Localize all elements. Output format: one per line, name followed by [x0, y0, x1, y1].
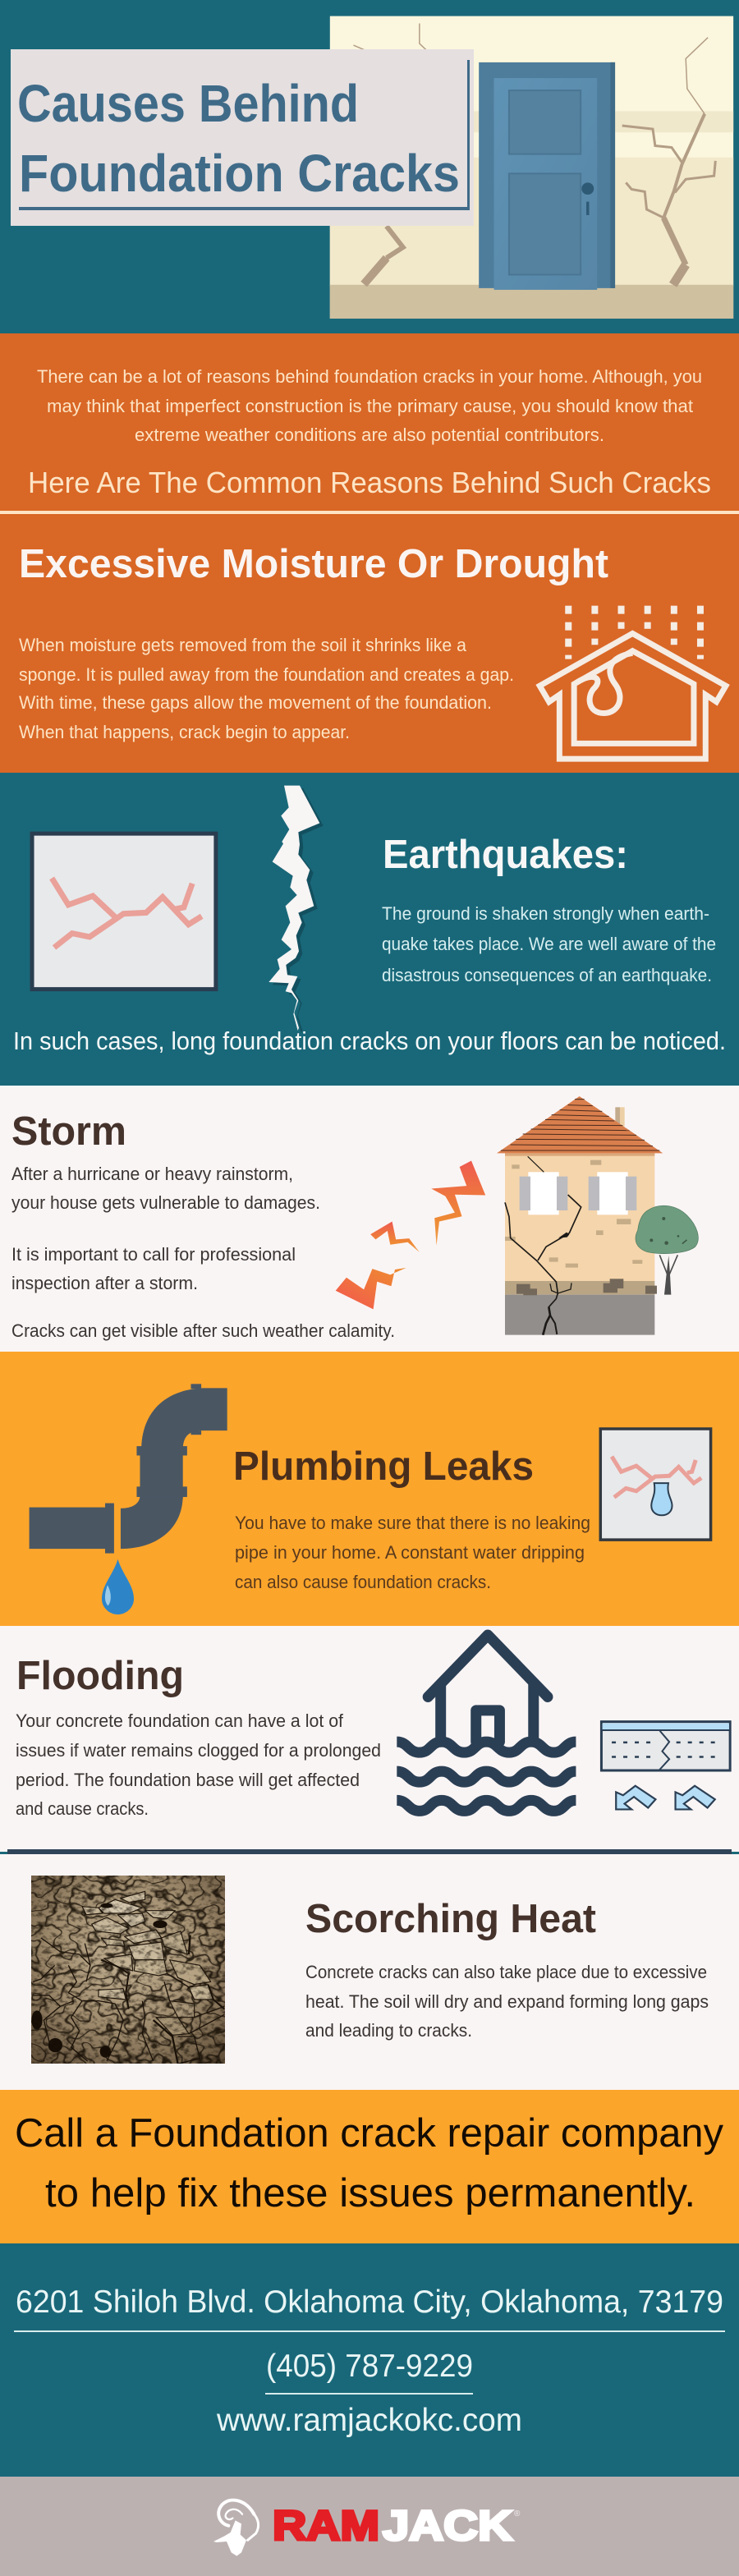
panel: storm — [0, 1086, 739, 1352]
logo: wordmark: JACK — [383, 2502, 512, 2549]
text: call to action — [15, 2111, 723, 2216]
text: scorching body: heat. The soil will dry and expand forming long gaps — [305, 1991, 709, 2012]
heading: scorching heat: Scorching Heat — [305, 1897, 596, 1941]
text: intro paragraph: There can be a lot of reasons behind foundation cracks in your home. Although, you — [37, 366, 702, 387]
text: flooding body — [16, 1710, 381, 1819]
illustration: ground crack — [269, 786, 324, 1033]
heading: storm: Storm — [11, 1109, 126, 1154]
text: plumbing body: You have to make sure that there is no leaking — [235, 1513, 590, 1533]
icon: cracked wall tile — [32, 833, 216, 990]
text: intro paragraph: extreme weather conditions are also potential contributors. — [135, 425, 604, 445]
text: call to action: Call a Foundation crack repair company — [15, 2111, 723, 2156]
text: scorching body: Concrete cracks can also take place due to excessive — [305, 1962, 707, 1982]
text: storm body: inspection after a storm. — [11, 1273, 198, 1293]
text: call to action: to help fix these issues permanently. — [45, 2171, 695, 2216]
text: moisture body — [19, 635, 514, 742]
text: scorching body — [305, 1962, 709, 2041]
text: flooding body: issues if water remains clogged for a prolonged — [16, 1740, 381, 1761]
panel: contact — [0, 2243, 739, 2477]
panel: earthquakes — [0, 773, 739, 1086]
text: flooding body: Your concrete foundation can have a lot of — [16, 1710, 344, 1731]
panel: call to action — [0, 2090, 739, 2243]
heading: title: Causes Behind — [17, 74, 359, 133]
text: plumbing body — [235, 1513, 590, 1592]
logo: wordmark: RAM — [273, 2502, 379, 2549]
panel: scorching heat — [0, 1854, 739, 2090]
icon: foundation section with arrows — [601, 1722, 730, 1809]
text: storm body: After a hurricane or heavy rainstorm, — [11, 1164, 293, 1184]
logo: wordmark — [273, 2502, 512, 2549]
text: moisture body: When moisture gets removed from the soil it shrinks like a — [19, 635, 466, 655]
text: storm body — [11, 1164, 395, 1341]
text: intro paragraph: may think that imperfect construction is the primary cause, you should know that — [47, 396, 694, 416]
heading: common reasons: Here Are The Common Reasons Behind Such Cracks — [28, 466, 711, 499]
text: earthquakes body: The ground is shaken strongly when earth- — [382, 903, 709, 924]
text: earthquakes body — [382, 903, 716, 985]
heading: flooding: Flooding — [16, 1654, 184, 1698]
panel: introduction — [0, 333, 739, 773]
text: website: www.ramjackokc.com — [216, 2403, 522, 2438]
text: earthquakes body: disastrous consequences of an earthquake. — [382, 965, 712, 985]
text: flooding body: and cause cracks. — [16, 1798, 149, 1819]
text: plumbing body: can also cause foundation cracks. — [235, 1572, 491, 1592]
heading: title: Foundation Cracks — [19, 144, 460, 203]
icon: cracked tile with drop — [600, 1429, 711, 1540]
text: storm body: It is important to call for professional — [11, 1244, 296, 1265]
text: address: 6201 Shiloh Blvd. Oklahoma City, Oklahoma, 73179 — [16, 2284, 723, 2320]
text: flooding body: period. The foundation base will get affected — [16, 1770, 360, 1790]
text: moisture body: With time, these gaps allow the movement of the foundation. — [19, 692, 492, 713]
panel: footer logo — [0, 2477, 739, 2576]
text: moisture body: When that happens, crack begin to appear. — [19, 722, 350, 742]
logo: ram head — [213, 2500, 259, 2556]
heading: plumbing leaks: Plumbing Leaks — [233, 1444, 534, 1489]
text: storm body: your house gets vulnerable to damages. — [11, 1192, 320, 1213]
image: cracked dry earth — [31, 1876, 225, 2064]
icon: flooded house — [397, 1635, 576, 1811]
heading: excessive moisture: Excessive Moisture Or Drought — [19, 542, 608, 586]
logo: registered mark: ® — [514, 2509, 521, 2519]
text: storm body: Cracks can get visible after such weather calamity. — [11, 1320, 395, 1341]
panel: flooding — [0, 1626, 739, 1854]
text: moisture body: sponge. It is pulled away from the foundation and creates a gap. — [19, 664, 514, 685]
panel: hero header — [0, 0, 739, 333]
text: plumbing body: pipe in your home. A constant water dripping — [235, 1542, 585, 1563]
title card — [11, 49, 474, 226]
icon: storm zigzags — [336, 1160, 485, 1309]
text: scorching body: and leading to cracks. — [305, 2020, 472, 2041]
icon: leaking pipe — [30, 1384, 227, 1614]
text: intro paragraph — [37, 366, 702, 445]
icon: house with moisture — [539, 606, 726, 759]
illustration: damaged house — [497, 1096, 698, 1335]
text: earthquakes body: quake takes place. We are well aware of the — [382, 934, 716, 954]
panel: plumbing leaks — [0, 1352, 739, 1626]
heading: earthquakes: Earthquakes: — [383, 833, 628, 877]
text: phone: (405) 787-9229 — [266, 2349, 473, 2384]
illustration: cracked wall with door — [330, 16, 733, 319]
heading: title — [17, 74, 460, 203]
